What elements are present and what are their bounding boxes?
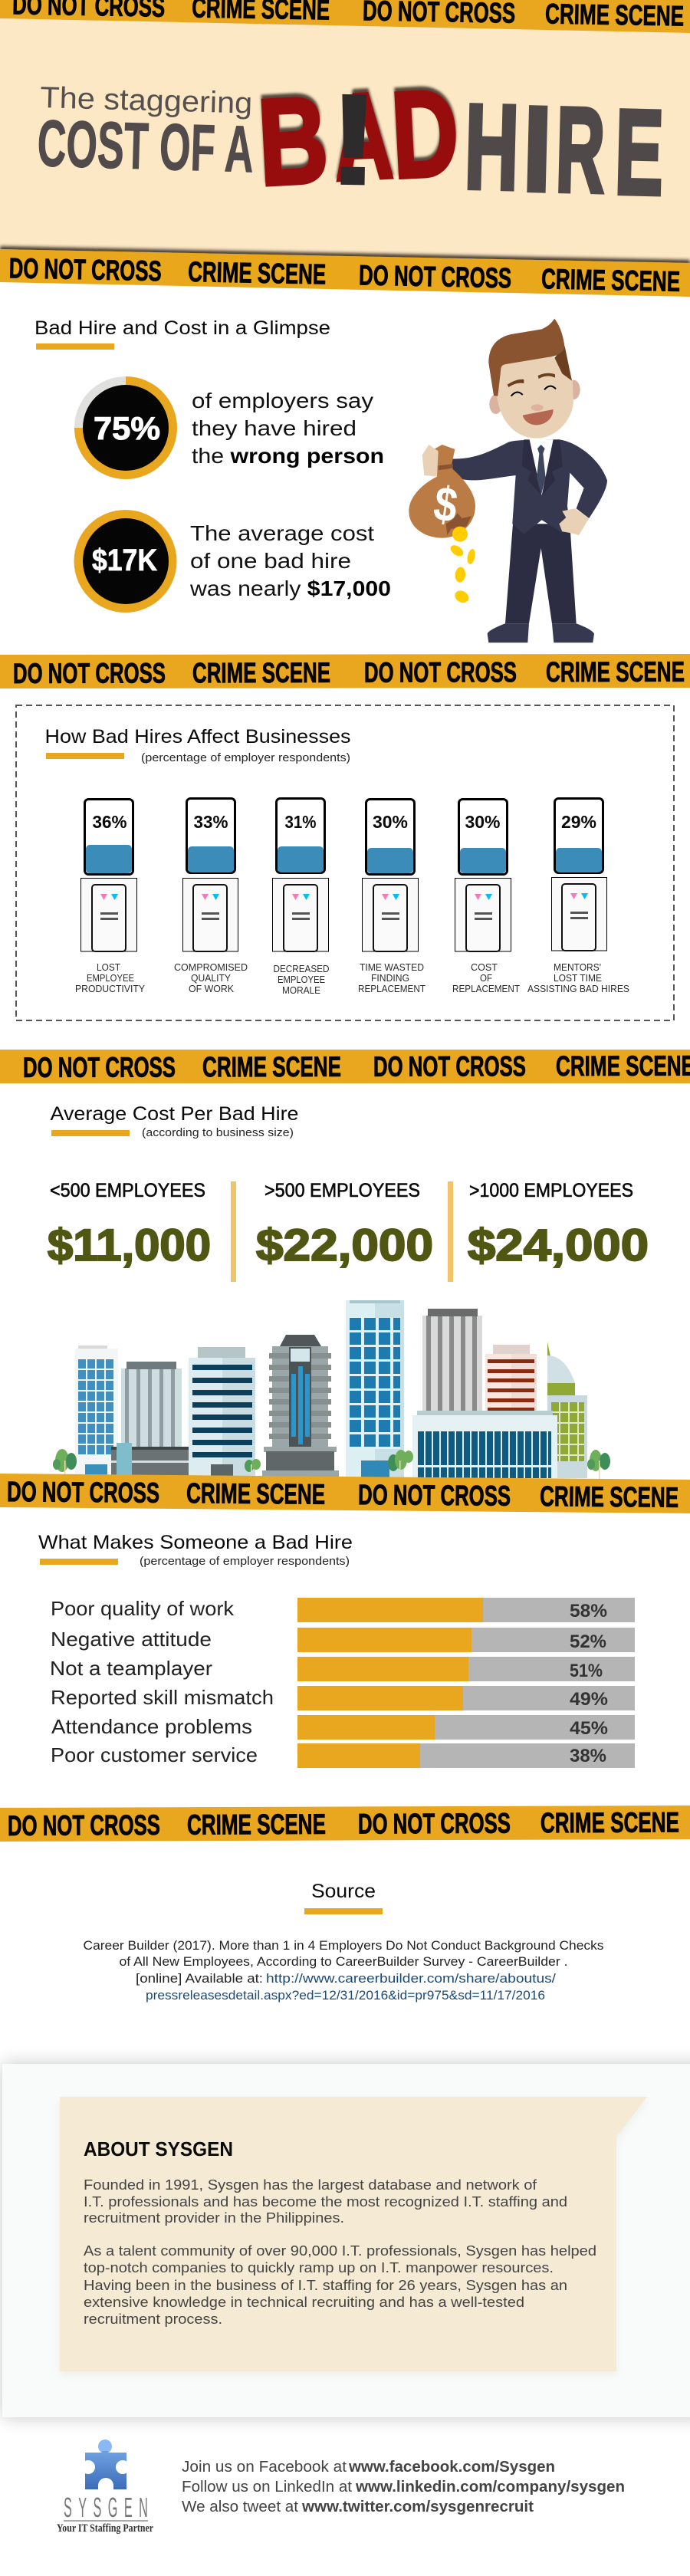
- divider: [231, 1181, 236, 1282]
- about card: top-notch companies to quickly ramp up on I.T. manpower resources.: [84, 2259, 554, 2275]
- meter: lost employee productivity 36%: LOST: [97, 961, 120, 973]
- stat: 75 percent: [74, 376, 384, 479]
- crime scene tape: under hero: [0, 249, 690, 297]
- illustration: businessman dropping coins from money bag: [409, 319, 607, 642]
- building: grey tower right: [422, 1309, 482, 1412]
- title word: BAD: [255, 64, 462, 212]
- bar: negative attitude: [51, 1628, 635, 1652]
- crime scene tape: fifth: CRIME SCENE: [186, 1477, 325, 1510]
- footer: social links: [182, 2459, 625, 2515]
- icon: trees: [53, 1449, 610, 1480]
- stat: 17K cost: [74, 510, 391, 613]
- bar chart: what makes a bad hire: [50, 1597, 635, 1768]
- crime scene tape: third: DO NOT CROSS: [364, 656, 517, 688]
- crime scene tape: fifth: [0, 1474, 690, 1513]
- bar: poor quality of work: [51, 1597, 635, 1622]
- cost: over 500 employees: >500 EMPLOYEES: [264, 1180, 420, 1201]
- cost: over 1000 employees: $24,000: [468, 1221, 649, 1270]
- about card: As a talent community of over 90,000 I.T. professionals, Sysgen has helped: [84, 2242, 596, 2259]
- meter: cost of replacement 30%: OF: [480, 972, 492, 984]
- meter: compromised quality of work 33%: COMPROMISED: [174, 961, 248, 973]
- icon: falling coins: [449, 527, 476, 605]
- hero background: [0, 18, 690, 264]
- title word: BAD: B: [255, 71, 331, 212]
- heading: average cost per bad hire: [51, 1103, 299, 1139]
- crime scene tape: sixth: [0, 1806, 690, 1842]
- section: source: of All New Employees, According to CareerBuilder Survey - CareerBuilder .: [120, 1954, 567, 1969]
- heading: bad hire and cost: [34, 317, 330, 350]
- bar: poor customer service: Poor customer service: [51, 1743, 258, 1766]
- about card: extensive knowledge in technical recruiting and has a well-tested: [84, 2294, 524, 2310]
- section: source: Source: [311, 1881, 376, 1902]
- meter: lost employee productivity 36%: PRODUCTIVITY: [75, 983, 145, 994]
- title word: HIRE: E: [613, 85, 665, 220]
- logo: sysgen: [57, 2440, 153, 2535]
- bar: poor quality of work: 58%: [570, 1601, 607, 1622]
- footer: social links: www.facebook.com/Sysgen: [348, 2459, 555, 2476]
- title word: HIRE: I: [521, 81, 554, 216]
- building: tall blue tower: [346, 1300, 404, 1477]
- about card: recruitment process.: [84, 2311, 222, 2327]
- about card: recruitment provider in the Philippines.: [84, 2210, 344, 2226]
- heading: what makes someone a bad hire: What Makes Someone a Bad Hire: [38, 1532, 353, 1553]
- bar: not a teamplayer: Not a teamplayer: [50, 1657, 212, 1680]
- meter: decreased employee morale 31%: [273, 799, 330, 996]
- meter: time wasted finding replacement 30%: [358, 799, 426, 994]
- about card: ABOUT SYSGEN: [84, 2137, 233, 2160]
- meter: mentors lost time 29%: LOST TIME: [554, 972, 602, 984]
- title: The staggering: [40, 81, 253, 120]
- heading: how bad hires: [44, 726, 351, 764]
- cost: over 500 employees: [256, 1180, 433, 1270]
- section: source: http://www.careerbuilder.com/share/aboutus/: [266, 1971, 556, 1986]
- cost: under 500 employees: [48, 1180, 211, 1270]
- cost: under 500 employees: <500 EMPLOYEES: [50, 1180, 205, 1201]
- bar: attendance problems: 45%: [570, 1718, 608, 1739]
- crime scene tape: fourth: DO NOT CROSS: [23, 1051, 176, 1083]
- stat: 75 percent: 75%: [94, 410, 160, 446]
- bar: poor quality of work: Poor quality of work: [51, 1597, 235, 1620]
- meter: compromised quality of work 33%: 33%: [193, 812, 228, 832]
- bar: negative attitude: 52%: [570, 1631, 606, 1652]
- footer: social links: www.linkedin.com/company/sysgen: [355, 2479, 625, 2496]
- stat: 17K cost: was nearly $17,000: [189, 577, 391, 600]
- crime scene tape: under hero: CRIME SCENE: [188, 256, 327, 291]
- stat: 17K cost: The average cost: [190, 521, 374, 545]
- meter: compromised quality of work 33%: OF WORK: [189, 983, 234, 994]
- crime scene tape: fourth: [0, 1050, 690, 1083]
- bar: reported skill mismatch: Reported skill mismatch: [51, 1686, 274, 1709]
- crime scene tape: third: CRIME SCENE: [192, 657, 330, 688]
- icon: puzzle piece: [81, 2440, 130, 2489]
- cost: over 500 employees: $22,000: [256, 1221, 433, 1270]
- title: [36, 64, 665, 220]
- meter: cost of replacement 30%: REPLACEMENT: [452, 983, 520, 994]
- crime scene tape: under hero: DO NOT CROSS: [359, 259, 512, 294]
- meter: mentors lost time 29%: ASSISTING BAD HIRES: [527, 983, 629, 994]
- bar: attendance problems: [51, 1715, 635, 1740]
- meter: time wasted finding replacement 30%: TIME WASTED: [360, 961, 424, 973]
- crime scene tape: fourth: CRIME SCENE: [202, 1051, 341, 1083]
- title word: HIRE: H: [463, 79, 521, 215]
- meter: mentors lost time 29%: 29%: [561, 812, 596, 832]
- crime scene tape: sixth: DO NOT CROSS: [358, 1808, 511, 1840]
- building: low wide office: [412, 1411, 557, 1478]
- meter: cost of replacement 30%: 30%: [465, 812, 500, 832]
- bar: negative attitude: Negative attitude: [51, 1628, 212, 1651]
- meter: lost employee productivity 36%: 36%: [92, 812, 127, 832]
- crime scene tape: fourth: DO NOT CROSS: [373, 1050, 526, 1083]
- meter: decreased employee morale 31%: EMPLOYEE: [278, 974, 325, 985]
- bar: reported skill mismatch: 49%: [570, 1689, 608, 1710]
- footer: social links: Follow us on LinkedIn at: [182, 2479, 352, 2496]
- meter: decreased employee morale 31%: MORALE: [282, 984, 320, 996]
- exclamation mark: !: [325, 66, 382, 212]
- about card: Founded in 1991, Sysgen has the largest database and network of: [84, 2177, 537, 2193]
- bar: poor customer service: 38%: [570, 1746, 606, 1766]
- bar: not a teamplayer: 51%: [570, 1661, 603, 1681]
- bar: reported skill mismatch: [51, 1686, 635, 1710]
- heading: how bad hires: How Bad Hires Affect Businesses: [44, 726, 351, 748]
- meter: mentors lost time 29%: [527, 799, 629, 994]
- bar: poor customer service: [51, 1743, 635, 1768]
- footer: social links: We also tweet at: [182, 2499, 298, 2515]
- crime scene tape: sixth: CRIME SCENE: [187, 1809, 326, 1841]
- title word: BAD: A: [330, 66, 396, 206]
- icon: dollar sign: $: [431, 477, 461, 533]
- section: source: Career Builder (2017). More than 1 in 4 Employers Do Not Conduct Background Checks: [83, 1938, 604, 1953]
- meter: compromised quality of work 33%: [174, 799, 248, 994]
- divider: [448, 1181, 453, 1282]
- crime scene tape: third: DO NOT CROSS: [13, 657, 166, 689]
- meter: time wasted finding replacement 30%: REPLACEMENT: [358, 983, 426, 994]
- meter: decreased employee morale 31%: DECREASED: [273, 963, 330, 974]
- stat: 17K cost: of one bad hire: [190, 549, 351, 573]
- stat: 75 percent: the wrong person: [192, 444, 384, 468]
- meter: time wasted finding replacement 30%: 30%: [373, 812, 408, 832]
- about card: Having been in the business of I.T. staffing for 26 years, Sysgen has an: [84, 2277, 567, 2293]
- heading: what makes someone a bad hire: (percentage of employer respondents): [140, 1555, 350, 1568]
- illustration: city skyline: [53, 1300, 610, 1480]
- meter: cost of replacement 30%: COST: [471, 961, 498, 973]
- building: red banded tower: [485, 1345, 537, 1411]
- heading: what makes someone a bad hire: [38, 1532, 353, 1568]
- building: grey striped tower: [111, 1362, 189, 1477]
- logo: sysgen: SYSGEN: [64, 2492, 148, 2523]
- title word: HIRE: R: [554, 82, 606, 218]
- meter: cost of replacement 30%: [452, 799, 520, 994]
- crime scene tape: third: [0, 654, 690, 689]
- title word: HIRE: [463, 79, 665, 220]
- stat: 75 percent: of employers say: [192, 389, 373, 412]
- building: green spire: [547, 1342, 587, 1478]
- title: COST OF A: [36, 107, 255, 186]
- panel: about sysgen: [2, 2064, 690, 2417]
- panel: how bad hires affect businesses: [16, 705, 674, 1020]
- meter: compromised quality of work 33%: QUALITY: [191, 972, 231, 984]
- crime scene tape: under hero: DO NOT CROSS: [8, 252, 162, 287]
- meter: lost employee productivity 36%: [75, 799, 145, 994]
- section: source: [83, 1881, 604, 2003]
- logo: sysgen: Your IT Staffing Partner: [57, 2522, 153, 2535]
- section: source: [online] Available at:: [136, 1971, 263, 1986]
- meter: mentors lost time 29%: MENTORS': [554, 961, 601, 973]
- crime scene tape: fifth: DO NOT CROSS: [358, 1479, 511, 1512]
- footer: social links: www.twitter.com/sysgenrecruit: [301, 2499, 534, 2515]
- cost: under 500 employees: $11,000: [48, 1221, 211, 1270]
- stat: 75 percent: they have hired: [192, 416, 356, 440]
- title word: BAD: D: [388, 64, 462, 204]
- bar: not a teamplayer: [50, 1657, 635, 1681]
- cost: over 1000 employees: [468, 1180, 649, 1270]
- building: banded tower: [189, 1347, 255, 1477]
- about card: I.T. professionals and has become the most recognized I.T. staffing and: [84, 2193, 567, 2210]
- meter: time wasted finding replacement 30%: FINDING: [371, 972, 409, 984]
- heading: bad hire and cost: Bad Hire and Cost in a Glimpse: [34, 317, 330, 339]
- bar: attendance problems: Attendance problems: [51, 1715, 252, 1738]
- building: white and blue tower: [75, 1346, 118, 1477]
- building: grey tower with blue lights: [262, 1335, 339, 1477]
- section: source: pressreleasesdetail.aspx?ed=12/31/2016&id=pr975&sd=11/17/2016: [146, 1988, 545, 2003]
- stat: 17K cost: $17K: [92, 544, 157, 577]
- footer: social links: Join us on Facebook at: [182, 2459, 347, 2476]
- heading: average cost per bad hire: (according to business size): [142, 1126, 294, 1139]
- cost: over 1000 employees: >1000 EMPLOYEES: [469, 1180, 633, 1201]
- crime scene tape: sixth: DO NOT CROSS: [8, 1809, 160, 1842]
- meter: lost employee productivity 36%: EMPLOYEE: [87, 972, 134, 984]
- heading: how bad hires: (percentage of employer respondents): [141, 751, 350, 764]
- meter: decreased employee morale 31%: 31%: [285, 812, 316, 832]
- heading: average cost per bad hire: Average Cost Per Bad Hire: [51, 1103, 299, 1125]
- about card: [60, 2097, 647, 2371]
- crime scene tape: fifth: DO NOT CROSS: [7, 1476, 159, 1509]
- crime scene tape: top: [0, 0, 690, 33]
